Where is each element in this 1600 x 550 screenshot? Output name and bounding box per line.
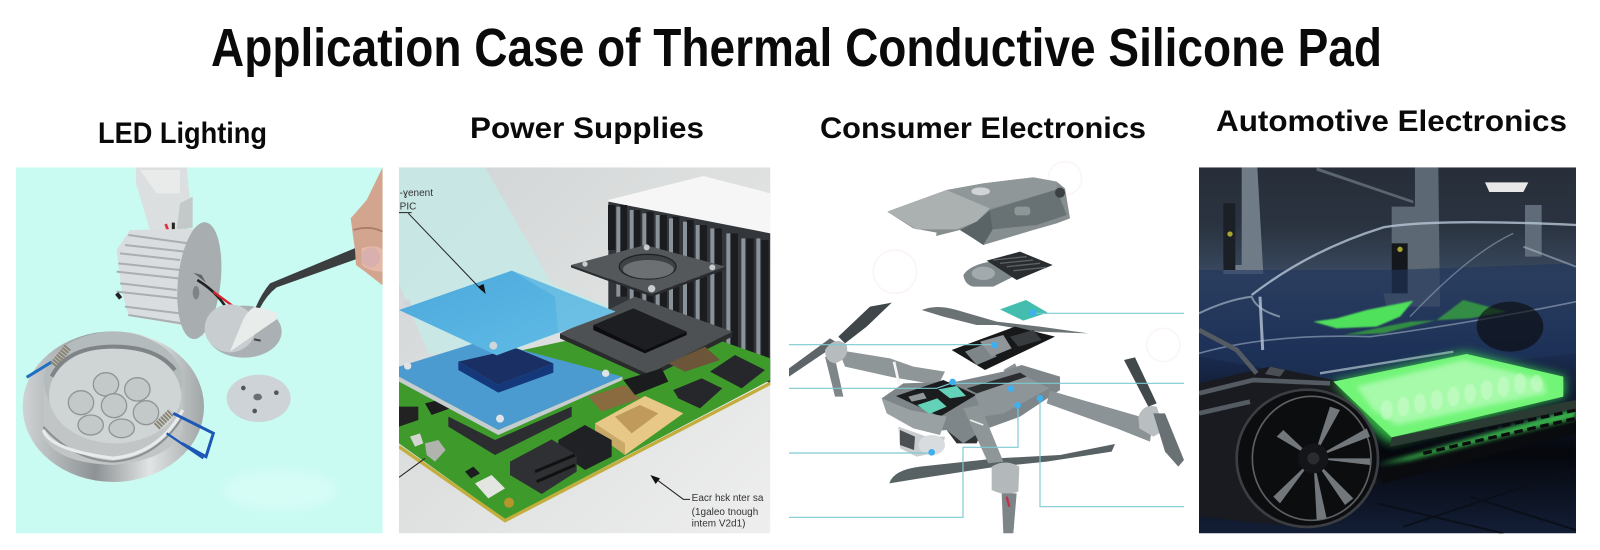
heading: Power Supplies: Power Supplies [470,112,704,145]
lower chassis rail [1373,408,1576,483]
icon: LED downlight [23,331,204,482]
rear wheel [1477,302,1543,352]
glowing seats [1313,300,1507,335]
icon: finned heat sink [117,220,227,341]
floor shading [1199,263,1576,380]
callout dots [928,309,1043,456]
heading: LED Lighting: LED Lighting [98,117,267,150]
icon: printed circuit board [399,337,770,521]
icon: LED lenses [68,373,159,438]
label: top left callout with arrow: -ɣenent [400,188,433,199]
icon: thermal pad being peeled [205,304,282,358]
panel: power supply circuit board [399,167,770,533]
label: bottom right callout with arrow [399,458,764,530]
icon: lower blue plate with chip [399,340,622,435]
callout lines [789,313,1184,517]
icon: wires [196,278,234,306]
building pillars and chargers [1223,167,1542,307]
icon: heat sink [608,176,770,383]
icon: upper metal plate [571,245,726,297]
car outline glass [1199,222,1576,373]
icon: teal thermal pad [1000,300,1048,321]
front wheel [1236,388,1379,528]
panel: LED lighting photo [16,167,383,533]
icon: main circuit board [952,327,1055,377]
label: bottom right callout with arrow: (1galeo tnough [692,507,758,518]
front suspension and chassis [1199,330,1377,527]
heading: Automotive Electronics: Automotive Electronics [1216,105,1567,138]
label: top left callout with arrow [399,188,486,294]
panel: automotive electronics car with glowing battery [1199,167,1576,533]
icon: rear left propeller and arm [789,303,945,397]
label: top left callout with arrow: PIC [400,201,416,212]
title: Application Case of Thermal Conductive Silicone Pad [211,18,1382,78]
light beam [399,167,618,357]
icon: drone top shell [887,177,1070,245]
icon: hand [351,167,383,285]
icon: tweezers [256,248,356,308]
icon: fan and heat sink [963,252,1053,287]
heading: Consumer Electronics: Consumer Electronics [820,112,1146,145]
glowing battery pack [1333,352,1576,447]
icon: round thermal pad with holes [227,375,291,422]
icon: LED driver box [136,167,193,231]
watermark [873,162,1180,362]
icon: front propeller and arm [889,405,1115,533]
icon: lower dark plate and chip [560,297,732,378]
icon: blue thermal pad [399,271,616,355]
icon: right rear arm and propeller [1047,357,1184,467]
icon: rear centre propeller [922,307,1088,333]
label: bottom right callout with arrow: Eacr hɛk nter sa [692,493,764,504]
icon: spring clips [27,347,213,458]
icon: drone body [882,365,1060,443]
floor texture [1377,470,1576,533]
icon: board components [399,347,765,498]
label: bottom right callout with arrow: intem V2d1) [692,519,746,530]
panel: consumer electronics drone exploded view [771,157,1184,533]
icon: gimbal camera [898,427,945,457]
